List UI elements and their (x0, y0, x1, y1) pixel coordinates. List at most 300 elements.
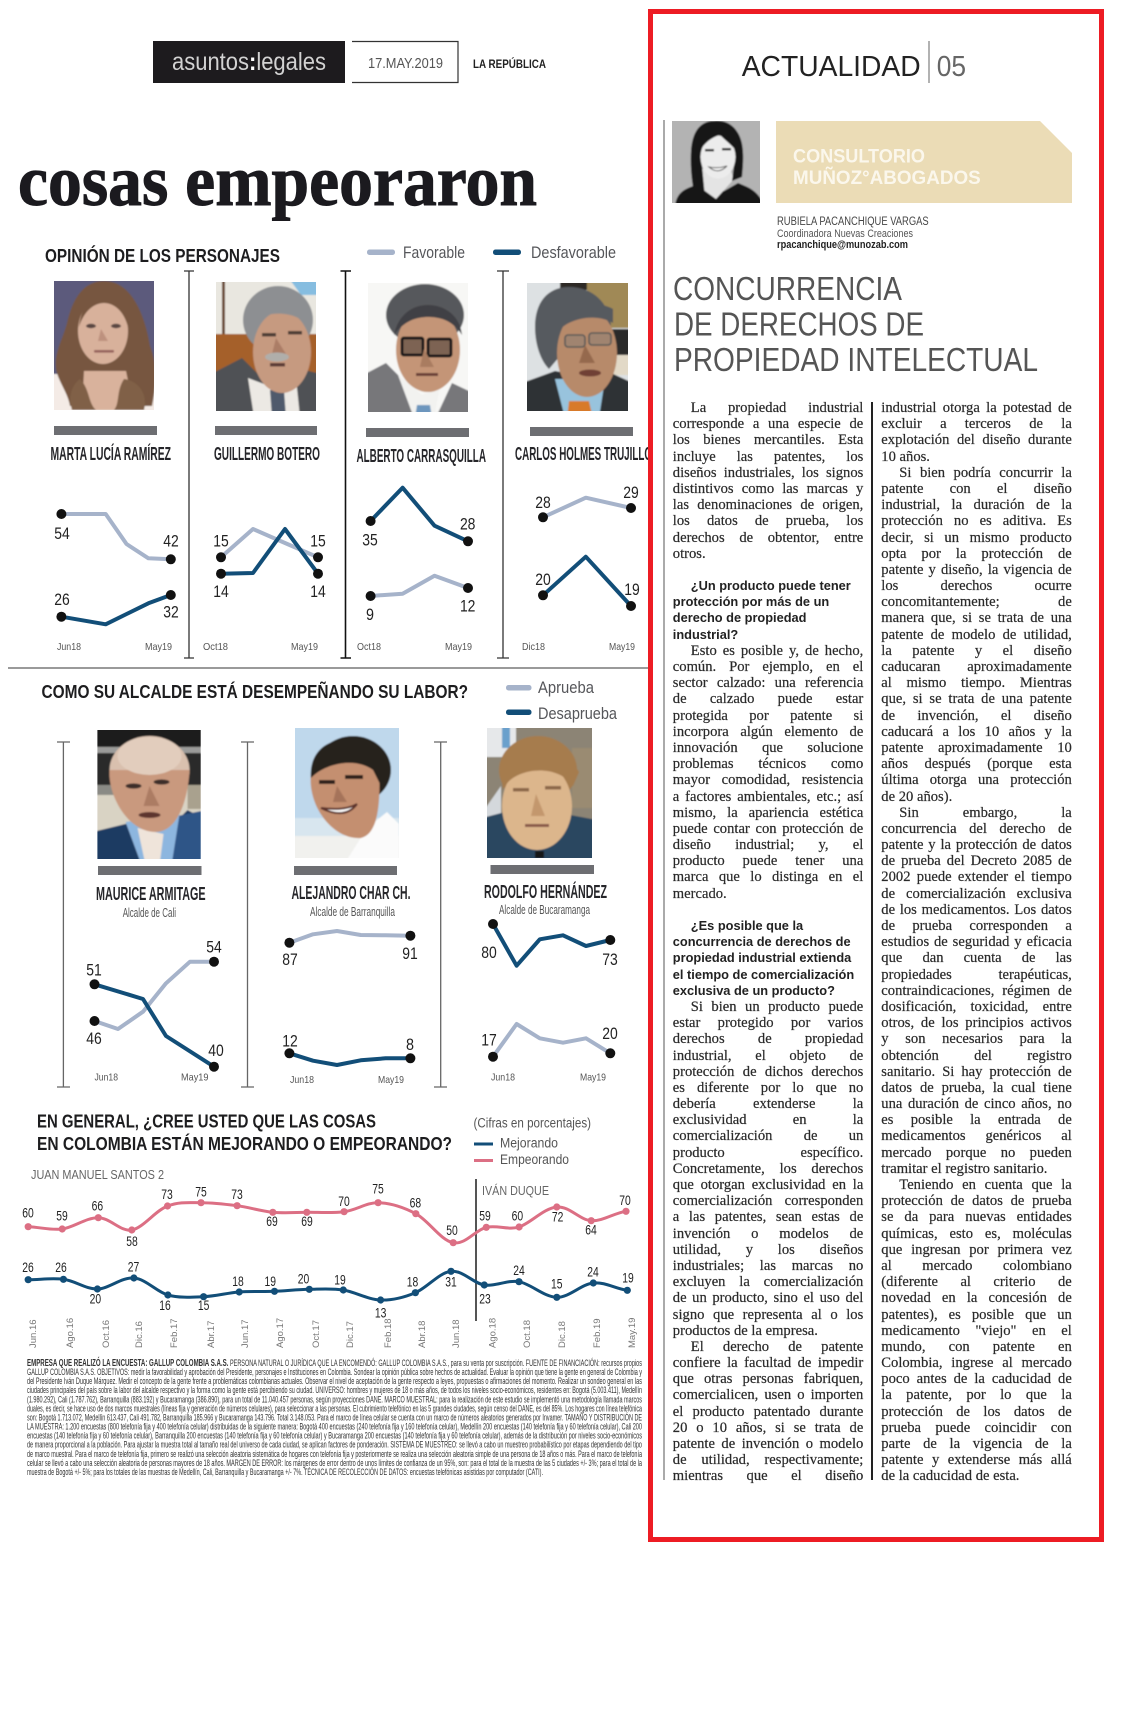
line chart: Char: 8 (406, 1035, 414, 1054)
paragraph: answer 2: productos de la empresa. (673, 1323, 818, 1339)
paragraph: answer 2: comercialización corresponden (673, 1193, 863, 1209)
paragraph: answer 1: sector calzado: una referencia (673, 675, 863, 691)
question heading 2: ¿Es posible que la (691, 918, 803, 933)
question heading 2: concurrencia de derechos de (673, 934, 851, 949)
date box (352, 42, 458, 82)
line: empeorando: 69 (266, 1213, 278, 1229)
month axis: Ago.17 (275, 1318, 286, 1348)
main headline: cosas empeoraron (18, 141, 537, 221)
name: Guillermo Botero: GUILLERMO BOTERO (214, 444, 320, 464)
paragraph: derecho de patente: de utilidad, respectivamente; (673, 1452, 863, 1468)
line: empeorando: 72 (552, 1209, 564, 1225)
question heading 2: el tiempo de comercialización (673, 967, 854, 982)
line chart: Hernandez: 20 (602, 1024, 618, 1043)
line: empeorando: 73 (161, 1186, 173, 1202)
name: Marta Lucia Ramirez: MARTA LUCÍA RAMÍREZ (50, 443, 171, 464)
paragraph: answer 1: de calzado puede estar (673, 691, 863, 707)
article column 2 (881, 400, 1072, 1484)
paragraph: concurrencia patente y diseño: de 20 años). (881, 788, 952, 804)
paragraph: conclusion: parte de la vigencia de la (881, 1436, 1072, 1452)
photo: Marta Lucia Ramirez (54, 281, 154, 410)
month axis: Oct.18 (522, 1320, 533, 1348)
survey methodology footnote: ciudades principales del país sobre la labor del alcalde respectivo y la forma como la gente está percibiendo su ciudad. UNIVERSO: hombres y mujeres de 18 o más años, de todos los niveles socio-económicos, residentes en: Bogotá (5.003.411), Medellín (27, 1385, 642, 1395)
paragraph: concurrencia patente y diseño: años después (porque esta (881, 756, 1072, 772)
banner: consultorio (776, 121, 1072, 203)
paragraph: answer 1: mayor comodidad, resistencia (673, 772, 863, 788)
article title: CONCURRENCIA (673, 270, 902, 307)
month axis: Ago.16 (65, 1318, 76, 1348)
author credit: Coordinadora Nuevas Creaciones (777, 228, 913, 240)
paragraph: datos de prueba (881, 805, 1072, 1177)
question heading 1: ¿Un producto puede tener (691, 578, 851, 593)
paragraph: datos de prueba: obtención del registro (881, 1048, 1072, 1064)
date box: 17.MAY.2019 (368, 56, 443, 72)
panel: alcaldes (42, 678, 618, 1087)
article title: DE DERECHOS DE (674, 306, 924, 343)
paragraph: concurrencia patente y diseño: manera que, si se trata de una (881, 610, 1072, 626)
line: empeorando (22, 1180, 631, 1249)
photo: Alberto Carrasquilla (368, 283, 468, 412)
paragraph: datos de prueba: patente y la protección de datos (881, 837, 1072, 853)
paragraph: conclusion: la patente, por lo que la (881, 1387, 1072, 1403)
name: Maurice Armitage (96, 884, 206, 920)
line chart: Alberto Carrasquilla: May19 (445, 641, 472, 653)
line chart: Marta Lucia Ramirez: 26 (54, 590, 70, 609)
paragraph: answer 1: a factores ambientales, etc.; así (673, 788, 863, 804)
legend: Empeorando (500, 1152, 569, 1167)
line: mejorando: 18 (232, 1273, 244, 1289)
paragraph: derecho de patente: que otras personas fabriquen, (673, 1371, 863, 1387)
line chart: Alberto Carrasquilla (357, 488, 475, 653)
paragraph: answer 2: es diferente por lo que no (673, 1080, 863, 1096)
line chart: Armitage: 46 (86, 1029, 102, 1048)
paragraph: derecho de patente (672, 1339, 864, 1484)
paragraph: conclusion: novedad en la concesión de (881, 1290, 1072, 1306)
paragraph: concurrencia patente y diseño: patente de modelo de utilidad, (881, 627, 1072, 643)
line chart: Alberto Carrasquilla: 28 (460, 514, 475, 533)
paragraph: concurrencia patente y diseño: patente con el diseño (881, 481, 1072, 497)
paragraph: derecho de patente: confiere la facultad de impedir (673, 1355, 863, 1371)
paragraph: conclusion: protección de datos de prueba (881, 1193, 1072, 1209)
paragraph: datos de prueba: de prueba del Decreto 2085 de (881, 853, 1072, 869)
photo: Carlos Holmes Trujillo (527, 283, 628, 411)
month axis: Feb.18 (383, 1318, 394, 1348)
banner: consultorio: CONSULTORIO (793, 147, 925, 168)
paragraph: datos de prueba: concurrencia del derecho de (881, 821, 1072, 837)
line chart: Marta Lucia Ramirez (54, 509, 179, 653)
president label: Duque: IVÁN DUQUE (482, 1183, 549, 1198)
paragraph: conclusion: Teniendo en cuenta que la (899, 1177, 1072, 1193)
paragraph: answer 2: producto específico. (673, 1145, 863, 1161)
month axis: Feb.17 (169, 1318, 180, 1348)
paragraph: answer 1: producto puede tener una (673, 853, 863, 869)
article title (673, 270, 1038, 378)
month axis: Abr.17 (206, 1321, 217, 1348)
paragraph: datos de prueba: sanitario. Si hay protección de (881, 1064, 1072, 1080)
question heading 2: exclusiva de un producto? (673, 983, 835, 998)
month axis: Jun.18 (451, 1319, 462, 1348)
paragraph: derecho de patente: 20 o 10 años, si se trata de (673, 1420, 863, 1436)
photo: Maurice Armitage (97, 730, 201, 859)
masthead (153, 41, 546, 83)
paragraph: answer 1: diseño industrial; y, el (673, 837, 863, 853)
name: Maurice Armitage: Alcalde de Cali (123, 905, 176, 920)
paragraph: concurrencia patente y diseño: de invención, el diseño (881, 708, 1072, 724)
paragraph: conclusion (881, 1177, 1072, 1484)
legend: Aprueba (538, 678, 594, 697)
paragraph: concurrencia patente y diseño: opta por la protección de (881, 546, 1072, 562)
paragraph: conclusion: protección de los datos de (881, 1404, 1072, 1420)
line chart: Guillermo Botero: 15 (310, 532, 326, 551)
paragraph: answer 1: problemas técnicos como (673, 756, 863, 772)
line: mejorando: 19 (334, 1271, 346, 1287)
legend: Favorable (403, 243, 465, 262)
paragraph: answer 2: signo que representa al o los (673, 1306, 863, 1322)
line: empeorando: 64 (585, 1221, 597, 1237)
paragraph: intro: incluye las patentes, los (673, 449, 863, 465)
line: mejorando: 20 (90, 1290, 101, 1306)
paragraph: datos de prueba: tramitar el registro sanitario. (881, 1161, 1047, 1177)
line chart: Guillermo Botero: 15 (213, 532, 229, 551)
paragraph: concurrencia patente y diseño: protección no es aditiva. Es (881, 513, 1072, 529)
paragraph: conclusion: al mercado colombiano (881, 1258, 1072, 1274)
paragraph: answer 2: estar protegido por varios (673, 1015, 863, 1031)
name: Rodolfo Hernandez (484, 881, 607, 917)
paragraph: conclusion: prueba puede coincidir con (881, 1420, 1072, 1436)
paragraph: answer 1: protegida por patente si (673, 708, 863, 724)
publication name: LA REPÚBLICA (473, 58, 546, 71)
paragraph: answer 1: marca que lo distinga en el (673, 869, 863, 885)
line: empeorando: 70 (619, 1192, 631, 1208)
question heading 2 (673, 918, 854, 998)
month axis: Abr.18 (417, 1321, 428, 1348)
line: mejorando: 31 (445, 1274, 457, 1290)
paragraph: datos de prueba: estudios de seguridad y eficacia (881, 934, 1072, 950)
legend (474, 1136, 569, 1167)
paragraph: answer 1: incorpora algún elemento de (673, 724, 863, 740)
name: Alejandro Char (292, 883, 410, 919)
line: mejorando: 16 (159, 1297, 171, 1313)
section label: asuntos legales: asuntos:legales (172, 48, 326, 76)
paragraph: intro: los bienes mercantiles. Esta (673, 432, 863, 448)
question heading 1: protección por más de un (673, 594, 829, 609)
line chart: Armitage: 51 (86, 961, 102, 980)
line chart: Armitage: May19 (181, 1072, 209, 1084)
paragraph: conclusion: se da para nuevas entidades (881, 1209, 1072, 1225)
line chart: Marta Lucia Ramirez: 42 (163, 532, 179, 551)
paragraph: datos de prueba: de prueba corresponden a (881, 918, 1072, 934)
section header: actualidad: 05 (937, 51, 966, 83)
paragraph: concurrencia patente y diseño: caducaran aproximadamente (881, 659, 1072, 675)
banner: consultorio: MUÑOZ°ABOGADOS (793, 167, 981, 189)
paragraph: datos de prueba: es posible la entrada de (881, 1112, 1072, 1128)
line chart: Char: 12 (282, 1032, 298, 1051)
paragraph: answer 2: Si bien un producto puede (691, 999, 863, 1015)
line chart: Char: 91 (402, 944, 418, 963)
survey methodology footnote: encuestas (140 telefonía fija y 60 telefonía celular), Barranquilla 200 encuestas (140 telefonía fija y 60 telefonía celular) y Bucaramanga 200 encuestas (140 telefonía fija y 60 telefonía celular), además de la distribución por niveles socio-económicos (27, 1431, 642, 1441)
line chart: Marta Lucia Ramirez: 54 (54, 524, 70, 543)
month axis: Jun.17 (240, 1319, 251, 1348)
month axis: Dic.17 (345, 1321, 356, 1348)
line: mejorando: 27 (128, 1259, 139, 1275)
paragraph: answer 2: industriales; las marcas no (673, 1258, 863, 1274)
paragraph: derecho de patente: mientras que el diseño (673, 1468, 863, 1484)
survey methodology footnote: celular se llevó a cabo una selección aleatoria de personas mayores de 18 años. MARGEN DE ERROR: los márgenes de error dentro de unos límites de confianza de un 95%, son: para el total de la muestra de las 5 ciudades +/- 3%; para el total de la (27, 1458, 642, 1468)
paragraph: answer 2: de un producto, sino el uso del (673, 1290, 863, 1306)
month axis: Ago.18 (488, 1318, 498, 1348)
line: empeorando: 60 (22, 1205, 34, 1221)
survey methodology footnote: LA MUESTRA: 1.200 encuestas (800 telefonía fija y 400 telefonía celular) distribuidas de la siguiente manera: Bogotá 400 encuestas (240 telefonía fija y 160 telefonía celular), Medellín 200 encuestas (140 telefonía fija y 60 telefonía celular), Cali 200 (27, 1422, 642, 1432)
line chart: Armitage: 54 (206, 937, 222, 956)
paragraph: continuation: 10 años. (881, 449, 930, 465)
line chart: Hernandez: 73 (602, 950, 618, 969)
question heading 1: derecho de propiedad (673, 610, 806, 625)
panel: opinion de los personajes (45, 243, 652, 658)
paragraph: datos de prueba: de los medicamentos. Los datos (881, 902, 1072, 918)
name: Alberto Carrasquilla: ALBERTO CARRASQUILLA (356, 446, 486, 466)
line: empeorando: 73 (231, 1186, 243, 1202)
paragraph: conclusion: de la caducidad de esta. (881, 1468, 1019, 1484)
president label: Santos: JUAN MANUEL SANTOS 2 (31, 1167, 164, 1182)
line chart: Guillermo Botero: 14 (213, 582, 229, 601)
survey methodology footnote: muestra de Bogotá +/- 5%; para los totales de las muestras de Medellín, Cali, Barranquilla y Bucaramanga +/- 7%. TÉCNICA DE RECOLECCIÓN DE DATOS: encuestas telefónicas asistidas por computador (CATI). (27, 1467, 543, 1477)
paragraph: conclusion: Colombia, ingrese al mercado (881, 1355, 1072, 1371)
paragraph: datos de prueba: contraindicaciones, régimen de (881, 983, 1072, 999)
heading: OPINIÓN DE LOS PERSONAJES (45, 245, 280, 266)
line chart: Char: May19 (378, 1074, 404, 1086)
photo: Guillermo Botero (216, 282, 316, 411)
line chart: Alberto Carrasquilla: 35 (362, 531, 378, 550)
paragraph: derecho de patente: comercialicen, usen o importen (673, 1387, 863, 1403)
paragraph: datos de prueba: 2002 puede extender el tiempo (881, 869, 1072, 885)
line: empeorando: 66 (92, 1198, 103, 1214)
paragraph: conclusion: que ingresan por primera vez (881, 1242, 1072, 1258)
survey methodology footnote: de marco muestral. Para el marco de telefonía fija, primero se realizó una selección aleatoria sistemática de hogares con telefonía fija y posteriormente se realiza una selección aleatoria simple de una persona de 18 años o más. Para el marco de telefonía (27, 1449, 642, 1459)
line chart: Carlos Holmes Trujillo: 29 (623, 483, 639, 502)
line chart: Armitage: Jun18 (94, 1072, 118, 1084)
legend (367, 243, 616, 262)
paragraph: answer 2: exclusividad en la (673, 1112, 863, 1128)
paragraph: concurrencia patente y diseño (881, 465, 1072, 804)
paragraph: concurrencia patente y diseño: decir, si un mismo producto (881, 530, 1072, 546)
line chart: Alberto Carrasquilla: 9 (366, 605, 374, 624)
line chart: Armitage: 40 (208, 1041, 224, 1060)
paragraph: datos de prueba: dosificación, toxicidad, entre (881, 999, 1072, 1015)
line chart: Char: 87 (282, 950, 298, 969)
month axis: Oct.16 (101, 1320, 112, 1348)
paragraph: concurrencia patente y diseño: patente y diseño, la vigencia de (881, 562, 1072, 578)
line: empeorando: 68 (410, 1195, 421, 1211)
paragraph: datos de prueba: Sin embargo, la (899, 805, 1072, 821)
line chart: Armitage (86, 937, 224, 1084)
paragraph: conclusion: patentes), es posible que un (881, 1306, 1072, 1322)
paragraph: answer 1: Esto es posible y, de hecho, (691, 643, 863, 659)
paragraph: answer 1: innovación que solucione (673, 740, 863, 756)
paragraph: concurrencia patente y diseño: concomitantemente; de (881, 594, 1072, 610)
paragraph: intro: las denominaciones de origen, (673, 497, 863, 513)
heading: EN GENERAL, ¿CREE USTED QUE LAS COSAS (37, 1112, 376, 1132)
line: mejorando: 23 (479, 1290, 491, 1306)
line: empeorando: 69 (301, 1213, 313, 1229)
paragraph: answer 1: puede contar con protección de (673, 821, 863, 837)
paragraph: concurrencia patente y diseño: al mismo tiempo. Mientras (881, 675, 1072, 691)
line: mejorando: 15 (198, 1297, 210, 1313)
paragraph: datos de prueba: datos de prueba, la cual tiene (881, 1080, 1072, 1096)
name: Rodolfo Hernandez: Alcalde de Bucaramanga (499, 902, 590, 917)
question heading 1 (673, 578, 851, 642)
paragraph: answer 2: a las patentes, sean estas de (673, 1209, 863, 1225)
paragraph: intro: los datos de prueba, los (673, 513, 863, 529)
paragraph: intro: distintivos como las marcas y (673, 481, 863, 497)
paragraph: concurrencia patente y diseño: caducará a los 10 años y la (881, 724, 1072, 740)
line chart: Guillermo Botero: Oct18 (203, 641, 228, 653)
survey methodology footnote: EMPRESA QUE REALIZÓ LA ENCUESTA: GALLUP COLOMBIA S.A.S. PERSONA NATURAL O JURÍDICA QUE LA ENCOMENDÓ: GALLUP COLOMBIA S.A.S., para su venta por suscripción. FUENTE DE FINANCIACIÓN: recursos propios (27, 1356, 642, 1369)
paragraph: answer 1: mercado. (673, 886, 727, 902)
line chart: Char (282, 931, 418, 1086)
line chart: Carlos Holmes Trujillo: 20 (535, 570, 551, 589)
line: mejorando: 24 (587, 1264, 599, 1280)
panel: mejorando o empeorando (22, 1112, 638, 1348)
paragraph: concurrencia patente y diseño: última otorga una protección (881, 772, 1072, 788)
line chart: Hernandez: 80 (481, 943, 497, 962)
paragraph: intro: derechos de obtentor, entre (673, 530, 863, 546)
line chart: Alberto Carrasquilla: 12 (460, 597, 475, 616)
line chart: Guillermo Botero (203, 529, 326, 653)
line: empeorando: 58 (126, 1233, 138, 1249)
paragraph: datos de prueba: una duración de cinco años, no (881, 1096, 1072, 1112)
legend: Mejorando (500, 1136, 558, 1151)
line: mejorando: 19 (622, 1269, 634, 1285)
panel frame: red highlight (650, 12, 1102, 1540)
line chart: Guillermo Botero: 14 (310, 582, 326, 601)
paragraph: answer 2 (672, 999, 864, 1339)
paragraph: intro: otros. (673, 546, 706, 562)
question heading 2: propiedad industrial extienda (673, 950, 851, 965)
paragraph: concurrencia patente y diseño: los derechos ocurre (881, 578, 1072, 594)
line chart: Char: Jun18 (290, 1074, 314, 1086)
month axis: Feb.19 (592, 1318, 603, 1348)
note: (Cifras en porcentajes) (474, 1116, 591, 1131)
name: Alejandro Char: Alcalde de Barranquilla (310, 904, 395, 919)
line chart: Carlos Holmes Trujillo (522, 483, 640, 653)
photo: Rodolfo Hernandez (487, 728, 592, 858)
line: mejorando (22, 1259, 634, 1320)
line chart: Guillermo Botero: May19 (291, 641, 318, 653)
line: mejorando: 20 (298, 1270, 309, 1286)
paragraph: answer 2: Concretamente, los derechos (673, 1161, 863, 1177)
line: empeorando: 59 (479, 1208, 491, 1224)
survey methodology footnote: son: Bogotá 1.713.072, Medellín 613.437, Cali 491.782, Barranquilla 185.966 y Bucaramanga 143.796. Total 3.148.053. Para el marco de línea celular se cuenta con un marco de números aleatorios generados por Invamer. TAMAÑO Y DISTRIBUCIÓN DE (27, 1412, 642, 1422)
line chart: Marta Lucia Ramirez: May19 (145, 641, 172, 653)
paragraph: conclusion: patente y extenderse más allá (881, 1452, 1072, 1468)
line chart: Carlos Holmes Trujillo: 28 (535, 493, 551, 512)
line: empeorando: 75 (195, 1184, 207, 1200)
line chart: Marta Lucia Ramirez: 32 (163, 603, 179, 622)
line: empeorando: 59 (56, 1208, 68, 1224)
name: Alejandro Char: ALEJANDRO CHAR CH. (292, 883, 410, 903)
line chart: Hernandez: Jun18 (491, 1072, 515, 1084)
heading: COMO SU ALCALDE ESTÁ DESEMPEÑANDO SU LABOR? (42, 681, 468, 702)
survey methodology footnote: (1.980.292), Cali (1.787.762), Barranquilla (883.192) y Bucaramanga (386.890), para un total de 11.040.457 personas, según proyecciones DANE. MARCO MUESTRAL: para la realización de este estudio se implementó una metodología llamada marcos (27, 1394, 642, 1404)
line: empeorando: 70 (338, 1193, 350, 1209)
line: mejorando: 18 (407, 1274, 418, 1290)
article title: PROPIEDAD INTELECTUAL (674, 341, 1038, 378)
paragraph: answer 2: industrial, el objeto de (673, 1048, 863, 1064)
survey methodology footnote: de manera proporcional a la población. Para ajustar la muestra total al tamaño real del universo de cada ciudad, se aplican factores de ponderación. SISTEMA DE MUESTREO: se llevó a cabo un muestreo probabilístico por etapas dependiendo del tipo (27, 1440, 642, 1450)
paragraph: datos de prueba: propiedades terapéuticas, (881, 967, 1072, 983)
paragraph: conclusion: químicas, esto es, moléculas (881, 1226, 1072, 1242)
author credit (777, 216, 929, 251)
paragraph: conclusion: poco antes de la caducidad de (881, 1371, 1072, 1387)
paragraph: continuation: explotación del diseño durante (881, 432, 1072, 448)
line: empeorando: 60 (512, 1208, 523, 1224)
paragraph: continuation (881, 400, 1072, 465)
paragraph: continuation: excluir a terceros de la (881, 416, 1072, 432)
paragraph: derecho de patente: el producto patentado durante (673, 1404, 863, 1420)
paragraph: datos de prueba: y son necesarios para la (881, 1031, 1072, 1047)
grey name bars (54, 426, 633, 437)
photo: author (672, 121, 760, 203)
line chart: Carlos Holmes Trujillo: May19 (609, 641, 635, 653)
article column 1 (672, 400, 864, 1484)
survey methodology footnote: GALLUP COLOMBIA S.A.S. OBJETIVOS: medir la favorabilidad y aprobación del Presidente, personajes e Instituciones en Colombia. Sondear la opinión pública sobre hechos de actualidad. Evaluar la opinión que tiene la gente en general de Colombia y (27, 1367, 642, 1377)
line: mejorando: 24 (513, 1262, 525, 1278)
paragraph: conclusion: (diferente al criterio de (881, 1274, 1072, 1290)
paragraph: datos de prueba: de comercialización exclusiva (881, 886, 1072, 902)
line: mejorando: 15 (551, 1275, 563, 1291)
paragraph: answer 2: invención o modelos de (673, 1226, 863, 1242)
line chart: Hernandez: May19 (580, 1072, 606, 1084)
section header: actualidad: ACTUALIDAD (742, 51, 921, 83)
line chart: Alberto Carrasquilla: Oct18 (357, 641, 381, 653)
line: empeorando: 75 (372, 1180, 384, 1196)
name: Rodolfo Hernandez: RODOLFO HERNÁNDEZ (484, 881, 607, 902)
paragraph: concurrencia patente y diseño: patente aproximadamente 10 (881, 740, 1072, 756)
heading (37, 1112, 452, 1154)
paragraph: answer 2: protección de dichos derechos (673, 1064, 863, 1080)
paragraph: datos de prueba: que dan cuenta de las (881, 950, 1072, 966)
month axis: Dic.16 (134, 1321, 145, 1348)
survey methodology footnote: duales, es decir, se hace uso de dos marcos muestrales (líneas fija y generación de números celulares), para seleccionar a las personas. El cubrimiento telefónico en las 5 grandes ciudades, según censo del DANE, es del 85%. Los hogares con línea telefónica (27, 1403, 642, 1413)
line chart: Carlos Holmes Trujillo: 19 (624, 580, 640, 599)
paragraph: answer 2: que otorgan exclusividad en la (673, 1177, 863, 1193)
paragraph: intro: corresponde a una especie de (673, 416, 863, 432)
line chart: Carlos Holmes Trujillo: Dic18 (522, 641, 545, 653)
month axis (28, 1318, 638, 1348)
paragraph: answer 2: comercialización de un (673, 1128, 863, 1144)
paragraph: answer 2: excluyen la comercialización (673, 1274, 863, 1290)
paragraph: intro: diseños industriales, los signos (673, 465, 863, 481)
author credit: rpacanchique@munozab.com (777, 239, 908, 251)
name: Carlos Holmes Trujillo: CARLOS HOLMES TRUJILLO (515, 444, 652, 464)
legend: Desfavorable (531, 243, 616, 262)
name: Maurice Armitage: MAURICE ARMITAGE (96, 884, 206, 904)
line chart: Hernandez: 17 (481, 1031, 497, 1050)
line: mejorando: 13 (375, 1304, 387, 1320)
paragraph: answer 1 (672, 643, 864, 902)
survey methodology footnote: del Presidente Iván Duque Márquez. Medir el concepto de la gente frente a problemáticas colombianas actuales. Observar el nivel de aceptación de la gente respecto a leyes, propuestas o afirmaciones del momento. Realizar un sondeo general en las (27, 1376, 642, 1386)
paragraph: intro (672, 400, 864, 562)
paragraph: conclusion: mundo, con patente en (881, 1339, 1072, 1355)
legend (506, 678, 617, 723)
paragraph: derecho de patente: El derecho de patente (691, 1339, 863, 1355)
line chart: Hernandez (481, 919, 618, 1084)
paragraph: concurrencia patente y diseño: Si bien podría concurrir la (899, 465, 1072, 481)
paragraph: concurrencia patente y diseño: que, si se trata de una patente (881, 691, 1072, 707)
heading: EN COLOMBIA ESTÁN MEJORANDO O EMPEORANDO? (37, 1133, 452, 1154)
paragraph: datos de prueba: mercado porque no pueden (881, 1145, 1072, 1161)
section label: asuntos legales (153, 41, 345, 83)
